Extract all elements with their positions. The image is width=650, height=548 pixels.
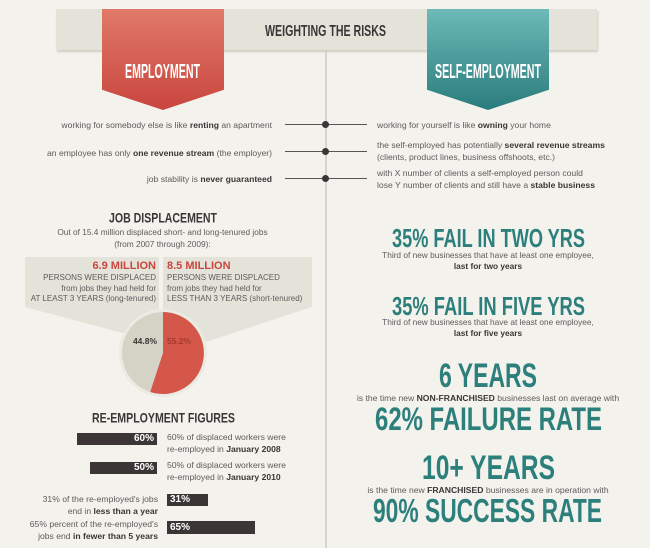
center divider line	[325, 40, 326, 548]
bar 65%	[30, 519, 158, 541]
subtext: non-franchised: is the time new NON-FRANCHISED businesses last on average with	[357, 393, 619, 403]
comparison rows	[47, 120, 605, 190]
subtext: two years: last for two years	[454, 261, 522, 271]
subtext: two years	[382, 250, 594, 271]
comparison rows: the self-employed has potentially several revenue streams	[377, 140, 605, 150]
re-employment heading: RE-EMPLOYMENT FIGURES	[92, 410, 235, 426]
callout: 8.5 million: PERSONS WERE DISPLACED	[167, 273, 280, 282]
comparison rows: lose Y number of clients and still have a stable business	[377, 180, 595, 190]
stat: 10+ years: 10+ YEARS	[422, 449, 555, 487]
comparison rows: (clients, product lines, business offshoots, etc.)	[377, 152, 555, 162]
bar 60%: 60%	[134, 433, 154, 444]
callout: 6.9 million: PERSONS WERE DISPLACED	[43, 273, 156, 282]
job displacement heading: JOB DISPLACEMENT	[109, 210, 217, 226]
job displacement heading: Out of 15.4 million displaced short- and long-tenured jobs	[57, 227, 268, 237]
text: 50% of displaced workers were	[167, 460, 286, 470]
bar 65%: jobs end in fewer than 5 years	[38, 531, 158, 541]
callout: 6.9 million: from jobs they had held for	[61, 284, 156, 292]
bar 65%: 65% percent of the re-employed's	[30, 519, 158, 529]
comparison rows: an employee has only one revenue stream (the employer)	[47, 148, 272, 158]
stat: 6 years: 6 YEARS	[439, 357, 537, 395]
subtext: five years	[382, 317, 594, 338]
callout: 8.5 million: from jobs they had held for	[167, 284, 262, 292]
text: re-employed in January 2008	[167, 444, 281, 454]
bar 60%	[77, 433, 157, 445]
subtext: five years: last for five years	[454, 328, 522, 338]
callout: 6.9 million: 6.9 MILLION	[92, 260, 156, 272]
job displacement heading	[57, 210, 268, 248]
callout: 8.5 million: 8.5 MILLION	[167, 260, 231, 272]
callout: 6.9 million: AT LEAST 3 YEARS (long-tenured)	[31, 294, 156, 303]
bar 31%: end in less than a year	[68, 506, 158, 516]
comparison rows: working for somebody else is like renting an apartment	[61, 120, 272, 130]
subtext: five years: Third of new businesses that have at least one employee,	[382, 317, 594, 327]
comparison rows: with X number of clients a self-employed person could	[377, 168, 583, 178]
right stats headings	[373, 223, 602, 529]
text: 60% of displaced workers were	[167, 432, 286, 442]
text: re-employed in January 2010	[167, 472, 281, 482]
ribbon: employment	[102, 9, 224, 110]
pie chart: 44.8%	[133, 336, 157, 346]
subtext: franchised: is the time new FRANCHISED businesses are in operation with	[367, 485, 609, 495]
bar 31%: 31% of the re-employed's jobs	[43, 494, 158, 504]
callout: 8.5 million	[167, 260, 302, 303]
text: 31%	[170, 494, 190, 505]
bar 31%	[43, 494, 158, 516]
bar 50%	[90, 462, 157, 474]
pie chart: 55.2%	[167, 336, 191, 346]
comparison rows: job stability is never guaranteed	[147, 174, 272, 184]
ribbon: self-employment	[427, 9, 549, 110]
job displacement heading: (from 2007 through 2009):	[114, 238, 211, 248]
callout: 6.9 million	[30, 260, 156, 303]
header banner	[56, 9, 597, 50]
callout: 8.5 million: LESS THAN 3 YEARS (short-tenured)	[167, 294, 302, 303]
comparison rows: working for yourself is like owning your home	[377, 120, 551, 130]
title: WEIGHTING THE RISKS	[265, 23, 386, 40]
text: 65%	[170, 522, 190, 533]
callout panels	[25, 257, 312, 342]
pie chart	[119, 309, 207, 397]
subtext: two years: Third of new businesses that have at least one employee,	[382, 250, 594, 260]
bar 50%: 50%	[134, 462, 154, 473]
